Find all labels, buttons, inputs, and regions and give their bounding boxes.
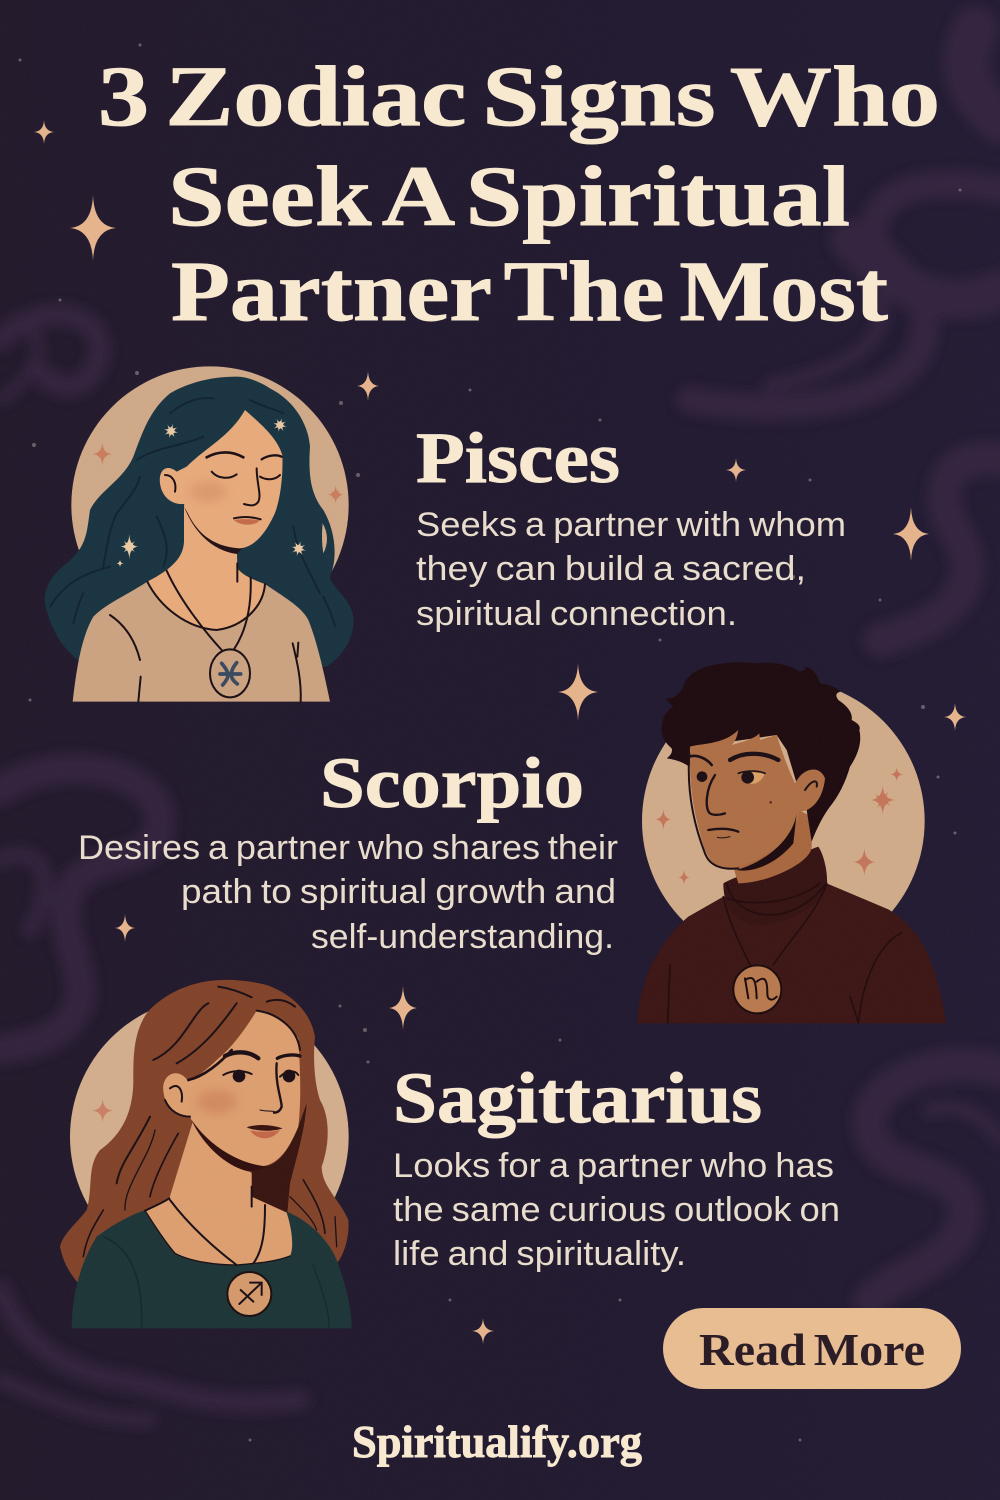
text: Sagittarius description: the same curious outlook on	[393, 1191, 840, 1229]
hair strands and facial lines	[83, 987, 337, 1328]
chest skin	[145, 1120, 292, 1265]
portrait: Sagittarius	[60, 980, 352, 1328]
pendant	[227, 1272, 271, 1316]
body	[72, 1210, 352, 1328]
sweater lines	[668, 883, 902, 1023]
eyes	[697, 771, 707, 782]
eye highlight	[745, 772, 765, 784]
text: Pisces description	[416, 506, 846, 633]
face	[160, 410, 283, 548]
hair	[662, 662, 860, 842]
face	[163, 1011, 300, 1166]
pendant symbol	[220, 663, 241, 685]
text: Scorpio description: Desires a partner who shares their	[78, 829, 618, 867]
moon gap	[322, 523, 327, 553]
facial lines	[165, 452, 282, 519]
button: Read More	[663, 1308, 961, 1389]
text: Pisces description: spiritual connection.	[416, 595, 737, 633]
lips	[247, 1125, 283, 1131]
moon disc	[642, 680, 925, 962]
cheek	[190, 482, 227, 502]
body	[73, 582, 330, 702]
cheek	[197, 1090, 237, 1114]
sagittarius symbol	[239, 1283, 262, 1304]
lip	[234, 519, 260, 525]
text: Sagittarius description	[393, 1147, 840, 1273]
title: 3 Zodiac Signs Who	[98, 48, 940, 144]
moon disc	[71, 366, 349, 644]
title: Partner The Most	[171, 243, 888, 339]
jaw shadow	[737, 813, 797, 871]
necklines and necklace	[110, 563, 301, 702]
moon stars	[655, 767, 903, 885]
heading: Sagittarius: Sagittarius	[393, 1058, 762, 1138]
hair	[45, 377, 354, 667]
jaw shadow	[184, 507, 243, 554]
footer: website: Spiritualify.org	[352, 1416, 642, 1467]
text: Scorpio description	[78, 829, 618, 956]
text: Scorpio description: self-understanding.	[311, 918, 614, 956]
moon star	[92, 1099, 113, 1123]
face	[690, 730, 799, 868]
neck	[147, 505, 265, 630]
hair stars	[116, 415, 309, 567]
button: Read More: Read More	[699, 1324, 925, 1375]
text: Pisces description: Seeks a partner with whom	[416, 506, 846, 544]
text: Scorpio description: path to spiritual growth and	[181, 873, 616, 911]
portrait: Scorpio	[637, 662, 946, 1023]
hair shadow	[252, 1103, 307, 1213]
neck	[733, 810, 812, 883]
text: Sagittarius description: Looks for a partner who has	[393, 1147, 834, 1185]
title	[98, 48, 940, 339]
facial lines	[689, 753, 817, 869]
title: Seek A Spiritual	[168, 148, 850, 244]
jaw shadow	[192, 1120, 270, 1172]
hair	[60, 980, 349, 1283]
sparkle stars	[34, 120, 966, 1344]
ear	[795, 769, 825, 812]
text: Pisces description: they can build a sacred,	[416, 550, 806, 588]
portrait: Pisces	[45, 366, 354, 702]
pendant	[733, 965, 781, 1013]
sweater	[637, 883, 946, 1023]
text: Sagittarius description: life and spirituality.	[393, 1235, 686, 1273]
hair strands	[50, 398, 335, 627]
heading: Scorpio: Scorpio	[320, 743, 584, 823]
turtleneck	[723, 847, 827, 925]
moon stars	[92, 442, 344, 504]
eyes	[233, 1070, 245, 1082]
scorpio symbol	[745, 978, 777, 1000]
moon disc	[70, 997, 349, 1276]
heading: Pisces: Pisces	[416, 418, 620, 498]
